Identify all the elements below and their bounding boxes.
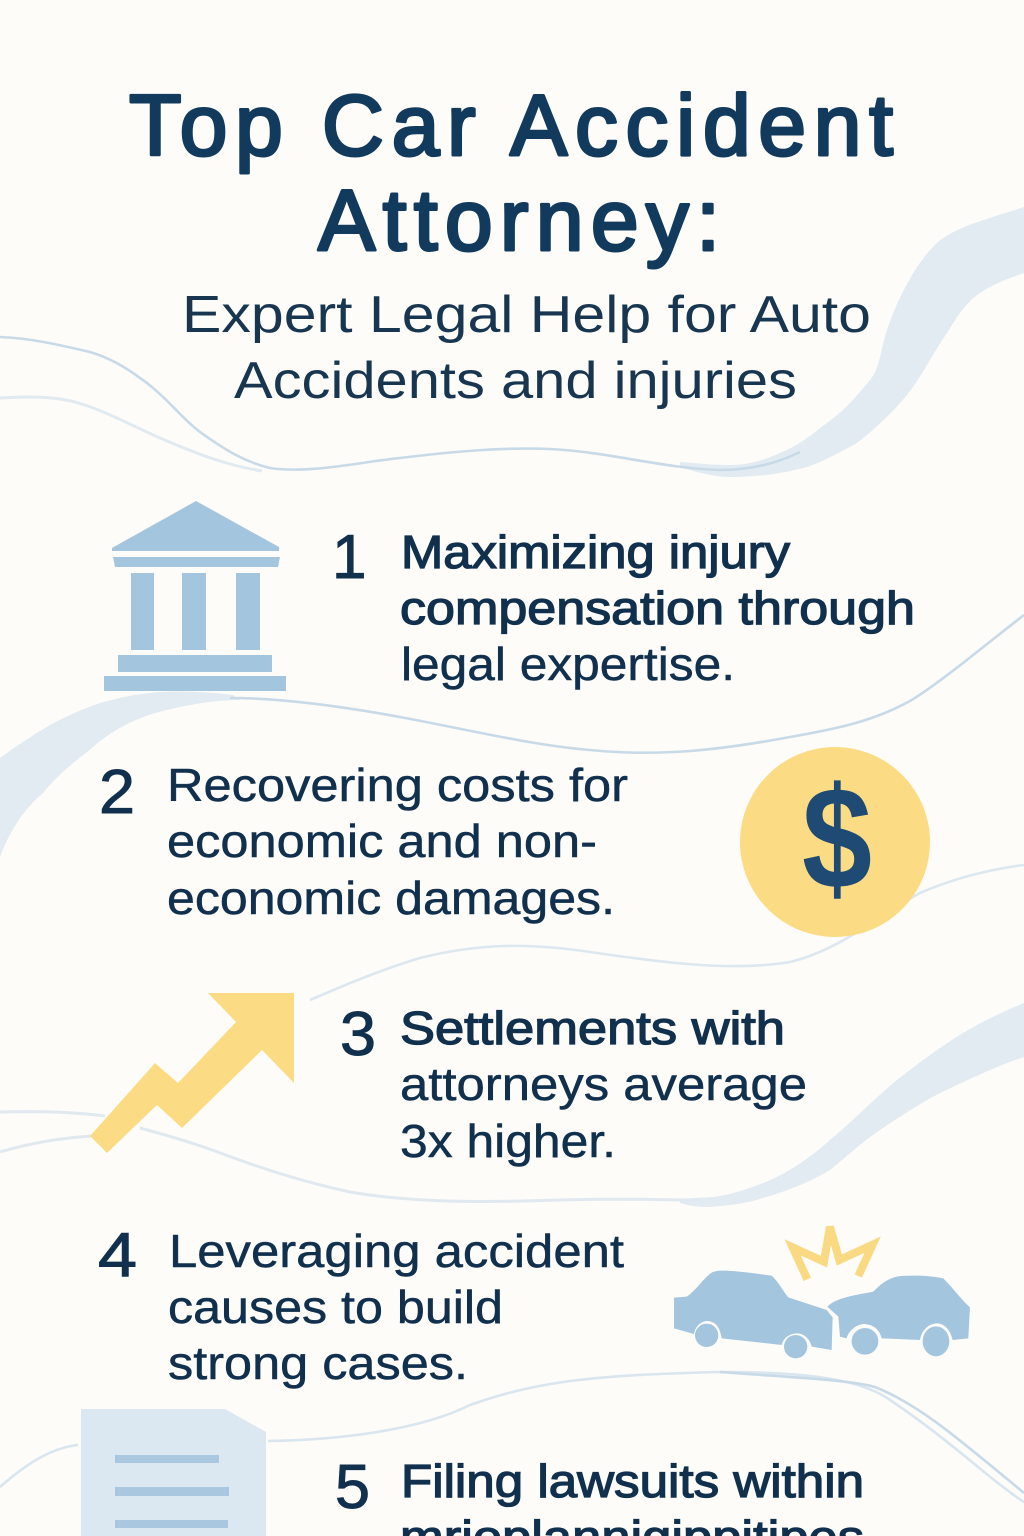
text: item 4: Leveraging accident <box>169 1225 624 1277</box>
icon: dollar coin: $ <box>802 757 872 919</box>
text: item 4 <box>168 1225 624 1389</box>
text: item 4: strong cases. <box>168 1337 468 1389</box>
text: item 5: Filing lawsuits within <box>401 1455 864 1507</box>
number 5: 5 <box>335 1453 370 1522</box>
item 2 <box>99 758 628 924</box>
subtitle: Expert Legal Help for Auto <box>182 286 871 344</box>
text: item 3 <box>400 1002 807 1167</box>
text: item 4: causes to build <box>168 1281 503 1333</box>
text: item 2 <box>167 759 628 924</box>
text: item 3: attorneys average <box>400 1058 807 1110</box>
text: item 1: compensation through <box>400 582 915 634</box>
text: item 1 <box>400 526 915 690</box>
item 1 <box>332 523 915 690</box>
subtitle <box>182 286 871 410</box>
right car <box>827 1276 970 1356</box>
item 3 <box>340 1000 807 1167</box>
text: item 1: legal expertise. <box>401 638 735 690</box>
icon: car crash <box>674 1227 970 1358</box>
title: Attorney: <box>318 173 720 269</box>
icon: courthouse <box>104 501 286 691</box>
icon: document <box>81 1409 266 1536</box>
item 4 <box>98 1221 624 1389</box>
icon: rising arrow <box>90 993 294 1153</box>
text: item 1: Maximizing injury <box>401 526 790 578</box>
item 5 <box>335 1453 864 1536</box>
spark <box>793 1227 873 1279</box>
text: item 2: economic and non- <box>167 815 597 867</box>
text: item 2: Recovering costs for <box>167 759 628 811</box>
number 1: 1 <box>332 523 366 592</box>
text: item 3: Settlements with <box>400 1002 785 1054</box>
number 3: 3 <box>340 1000 376 1069</box>
text: item 5 <box>400 1455 864 1536</box>
subtitle: Accidents and injuries <box>234 352 797 410</box>
title: Top Car Accident <box>129 78 893 174</box>
number 4: 4 <box>98 1221 137 1290</box>
icon: dollar coin <box>740 747 930 937</box>
title <box>129 78 893 269</box>
number 2: 2 <box>99 758 135 827</box>
left car <box>674 1271 833 1358</box>
text: item 2: economic damages. <box>167 872 615 924</box>
text: item 3: 3x higher. <box>400 1115 616 1167</box>
